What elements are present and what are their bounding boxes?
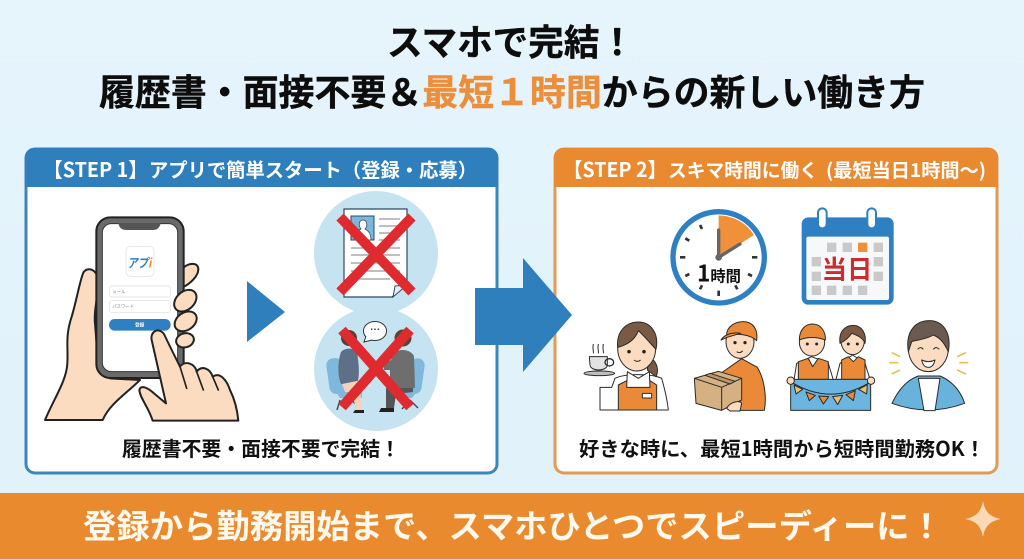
footer band (0, 493, 1024, 559)
illustration: delivery worker (694, 322, 765, 411)
app logo: アプi (127, 252, 153, 271)
arrow: big arrow between steps (475, 258, 572, 372)
login form (109, 286, 171, 331)
icon: calendar same day: 当日 (822, 250, 872, 286)
icon: resume crossed out (314, 191, 438, 315)
title: スマホで完結！ (387, 14, 635, 66)
step 2 header: 【STEP 2】 (563, 154, 667, 183)
speech bubble: … (370, 321, 380, 336)
illustration: cafe worker (584, 322, 668, 410)
title: 履歴書・面接不要＆最短１時間からの新しい働き方 (99, 64, 925, 116)
title (99, 14, 925, 116)
step 2 header: (最短当日1時間〜) (826, 156, 986, 183)
step 1 caption: 履歴書不要・面接不要で完結！ (122, 433, 400, 462)
step 1 header: 【STEP 1】 (43, 154, 148, 183)
step 2 header (554, 148, 998, 187)
icon: calendar same day (802, 208, 894, 305)
icon: sparkle (965, 501, 1001, 537)
step 2 header: スキマ時間に働く (668, 156, 818, 183)
panel: step 2 (554, 148, 998, 473)
step 1 header (25, 148, 498, 187)
login form: パスワード (112, 304, 134, 310)
app logo (126, 246, 154, 276)
arrow: small triangle (247, 281, 285, 342)
icon: clock 1 hour (673, 212, 764, 303)
login form: 登録 (135, 322, 145, 329)
panel: step 1 (25, 148, 498, 473)
step 1 header: アプリで簡単スタート（登録・応募） (149, 154, 477, 183)
icon: clock 1 hour: 1時間 (697, 255, 741, 288)
illustration: smiling person (889, 321, 968, 411)
illustration: staff holding banner (787, 324, 875, 410)
step 2 caption: 好きな時に、最短1時間から短時間勤務OK！ (579, 433, 985, 462)
icon: hand holding phone (45, 217, 238, 421)
icon: interview crossed out (314, 307, 438, 431)
login form: メール (112, 289, 126, 295)
footer band: 登録から勤務開始まで、スマホひとつでスピーディーに！ (83, 500, 943, 548)
